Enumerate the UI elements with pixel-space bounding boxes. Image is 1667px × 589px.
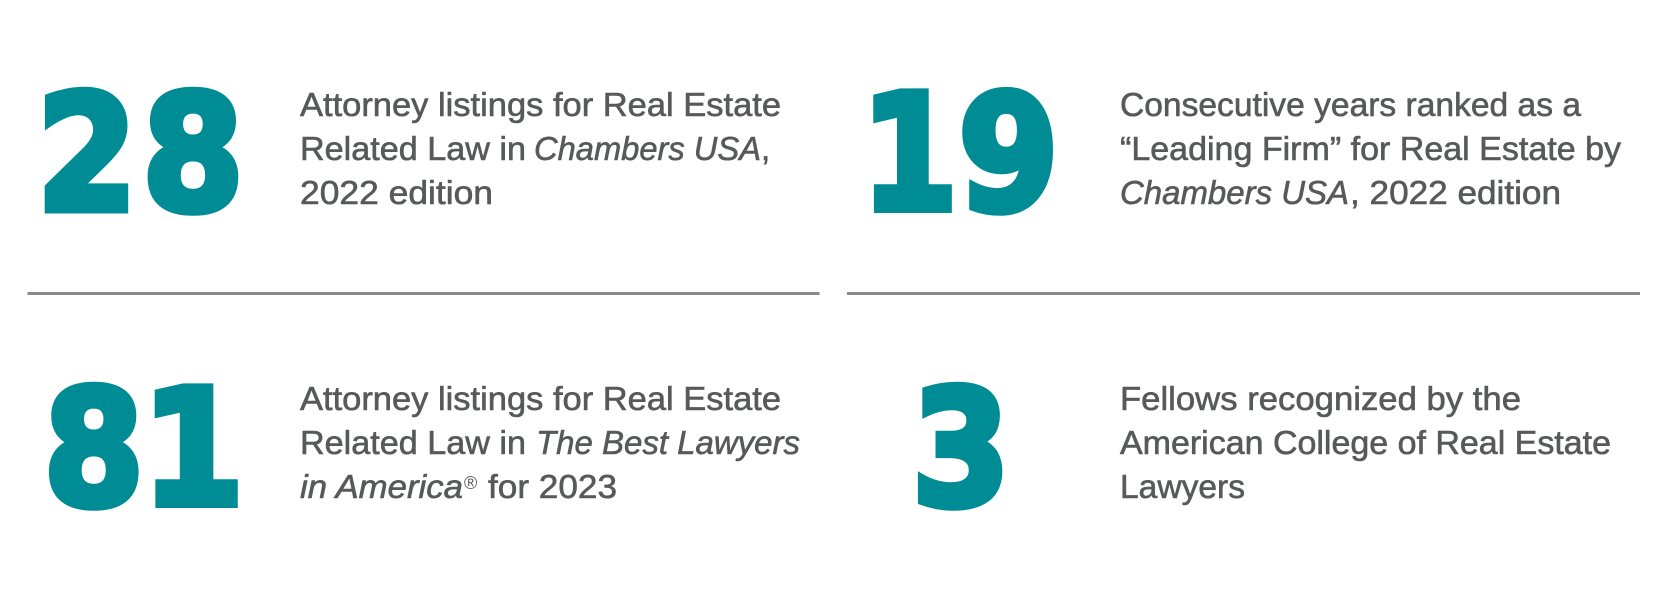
description: 28: , [761,130,770,167]
number: 81: 8 [44,356,144,542]
description: 3: American College of Real Estate [1120,424,1611,461]
description: 81: for 2023 [488,468,617,505]
description: 19: “Leading Firm” for Real Estate by [1120,130,1622,167]
number: 81: 1 [142,356,244,543]
description: 3: Lawyers [1120,468,1245,505]
number: 19: 9 [958,61,1059,247]
panel: 28 attorney listings Chambers [37,61,781,248]
panel: 81 attorney listings Best Lawyers [44,356,800,543]
description: 28: Chambers USA [534,130,761,167]
divider: left [28,292,820,295]
description: 28: 2022 edition [300,174,493,211]
description: 19: , 2022 edition [1350,174,1561,211]
panel: 3 fellows [912,356,1611,543]
description: 81: ® [464,473,477,493]
description: 3: Fellows recognized by the [1120,380,1521,417]
number: 19: 1 [861,62,958,247]
description: 81: Related Law in [300,424,526,461]
description: 81 [300,380,800,505]
description: 19 [1120,86,1622,211]
description: 81: The Best Lawyers [536,424,800,461]
divider: right [847,292,1640,295]
description: 19: Chambers USA [1120,174,1349,211]
description: 81: Attorney listings for Real Estate [300,380,781,417]
number: 81 [44,356,244,543]
panel: 19 consecutive years [861,61,1622,247]
number: 28 [37,61,244,248]
description: 81: in America [300,468,463,505]
number: 28: 2 [37,61,137,247]
description: 28: Attorney listings for Real Estate [300,86,781,123]
description: 28: Related Law in [300,130,526,167]
description: 3 [1120,380,1611,505]
number: 19 [861,61,1059,247]
description: 28 [300,86,781,211]
number: 3: 3 [912,356,1010,543]
number: 28: 8 [142,62,244,248]
description: 19: Consecutive years ranked as a [1120,86,1582,123]
